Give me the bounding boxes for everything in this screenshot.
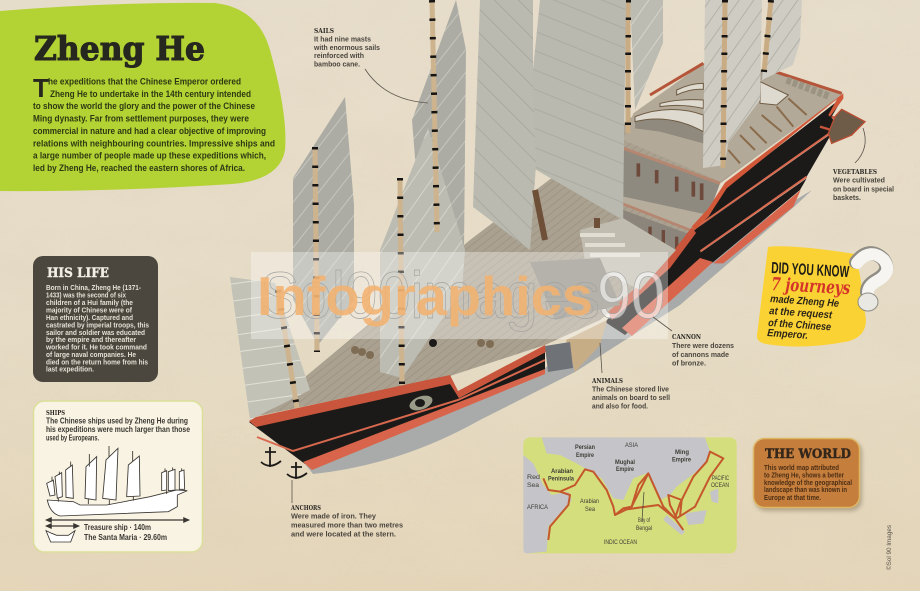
callout: did you know: made Zheng He xyxy=(770,293,840,310)
bow masts xyxy=(278,0,437,408)
his life text: of large naval companies. He xyxy=(46,350,136,359)
top rim xyxy=(692,93,843,230)
callout: sails: with enormous sails xyxy=(313,43,380,52)
map labels: AFRICA xyxy=(527,504,549,511)
map labels: INDIC OCEAN xyxy=(604,539,637,546)
hull bow section xyxy=(249,345,546,470)
callout: cannon: of cannons made xyxy=(672,350,729,359)
hull upper band xyxy=(687,97,843,233)
stern gallery with vegetable baskets xyxy=(828,109,865,143)
deck cargo xyxy=(530,218,676,320)
map labels: PACIFIC xyxy=(712,475,729,482)
his life text: died on the return home from his xyxy=(46,357,148,366)
callout: did you know: Emperor. xyxy=(767,327,809,342)
callout: animals xyxy=(591,343,670,410)
hull middle band xyxy=(690,133,832,257)
callout: vegetables: baskets. xyxy=(833,193,861,202)
map labels: Empire xyxy=(576,452,594,459)
his life text: 1433) was the second of six xyxy=(46,290,127,300)
intro text xyxy=(33,73,275,173)
map labels: Persian xyxy=(575,444,595,451)
lower wall xyxy=(623,210,687,262)
heading: his life: HIS LIFE xyxy=(47,266,109,281)
second deck xyxy=(623,197,708,230)
map labels: Arabian xyxy=(551,468,573,475)
panel: his life xyxy=(33,256,158,382)
his life text: children of a Hui family (the xyxy=(46,298,133,307)
callout: sails: SAILS xyxy=(314,27,334,35)
map labels: Ming xyxy=(675,449,689,456)
intro text: Zheng He to undertake in the 14th century intended xyxy=(50,88,251,99)
ship size comparison diagram xyxy=(46,446,189,542)
heading: ships: SHIPS xyxy=(46,409,65,417)
callout: anchors: measured more than two metres xyxy=(291,520,403,530)
heading: the world: THE WORLD xyxy=(765,447,851,462)
his life text: Han ethnicity). Captured and xyxy=(46,313,133,322)
ship illustration xyxy=(230,0,865,479)
awning interior xyxy=(635,114,703,143)
stern deck xyxy=(623,63,843,182)
mast base xyxy=(535,190,597,240)
map labels: Sea xyxy=(527,482,540,489)
intro text: commercial in nature and had a clear objective of improving xyxy=(33,125,266,136)
stern masts xyxy=(628,0,771,168)
far sails xyxy=(412,0,802,250)
panel: the world xyxy=(754,438,862,511)
main deck xyxy=(258,63,843,416)
intro text: Ming dynasty. Far from settlement purposes, they were xyxy=(33,112,249,124)
ship lengths: The Santa Maria · 29.60m xyxy=(84,533,167,542)
map labels xyxy=(527,442,729,546)
callout: vegetables: Were cultivated xyxy=(833,176,885,185)
callout: vegetables: VEGETABLES xyxy=(832,168,877,176)
map of zheng he voyages xyxy=(523,437,737,553)
ship lengths xyxy=(84,523,167,542)
upper deck wall xyxy=(623,148,720,215)
his life text: majority of Chinese were of xyxy=(46,306,132,314)
callout: did you know: at the request xyxy=(769,305,833,321)
callout: animals: The Chinese stored live xyxy=(592,384,669,394)
icon: question mark xyxy=(856,253,887,311)
the world text: This world map attributed xyxy=(764,463,839,472)
callout: vegetables: on board in special xyxy=(833,184,894,193)
red stripes xyxy=(692,128,837,257)
callout: sails xyxy=(313,27,428,103)
callout: did you know xyxy=(757,246,887,347)
map labels: Sea xyxy=(585,506,596,513)
callout: vegetables xyxy=(832,128,894,202)
rail details xyxy=(787,80,830,97)
his life text: sailor and soldier was educated xyxy=(46,328,145,337)
the world text: knowledge of the geographical xyxy=(764,478,852,487)
callout: did you know: DID YOU KNOW xyxy=(771,260,850,281)
far rail xyxy=(650,63,842,95)
callout: did you know: 7 journeys xyxy=(771,274,851,299)
panel: introduction xyxy=(0,3,285,191)
ships text: used by Europeans. xyxy=(46,434,99,442)
map labels: ASIA xyxy=(625,442,639,449)
intro text: he expeditions that the Chinese Emperor ordered xyxy=(48,76,241,86)
callout: cannon: CANNON xyxy=(672,333,701,341)
bow sails xyxy=(230,97,465,420)
awnings xyxy=(635,82,788,132)
the world text xyxy=(764,463,852,502)
the world text: to Zheng He, shows a better xyxy=(764,470,844,480)
his life text: last expedition. xyxy=(46,364,94,374)
callout: did you know: of the Chinese xyxy=(768,317,832,333)
callout: anchors: Were made of iron. They xyxy=(291,512,377,520)
his life text: by the empire and thereafter xyxy=(46,335,136,344)
the world text: landscape than was known in xyxy=(764,485,847,494)
his life text xyxy=(45,283,149,374)
voyage routes xyxy=(543,452,723,540)
his life text: Born in China, Zheng He (1371- xyxy=(46,283,141,292)
map labels: Empire xyxy=(672,456,691,464)
ships text xyxy=(46,416,190,442)
intro text: relations with neighbouring countries. Impressive ships and xyxy=(33,138,275,148)
callout: anchors xyxy=(290,480,403,538)
ship underside xyxy=(305,190,812,474)
callout: cannon: There were dozens xyxy=(672,341,734,350)
callout: sails: reinforced with xyxy=(314,51,364,60)
deck ribs xyxy=(728,98,807,163)
his life text: castrated by imperial troops, this xyxy=(46,320,149,329)
callout: anchors: ANCHORS xyxy=(290,504,321,512)
stern decks and hull xyxy=(623,63,865,263)
length arrows xyxy=(46,518,189,528)
title: Zheng He xyxy=(34,29,205,68)
hull midship section xyxy=(605,227,713,336)
callout: sails: bamboo cane. xyxy=(314,60,360,68)
callout: cannon xyxy=(653,317,734,368)
landmasses xyxy=(542,437,710,500)
his life text: worked for it. He took command xyxy=(45,342,147,352)
ships text: his expeditions were much larger than those xyxy=(46,425,190,434)
intro text: to show the world the glory and the power of the Chinese xyxy=(33,100,255,111)
callout: sails: It had nine masts xyxy=(314,34,371,44)
callout: animals: ANIMALS xyxy=(591,377,623,385)
callout: cannon: of bronze. xyxy=(672,358,706,368)
map labels: Empire xyxy=(616,466,634,473)
hull lower band xyxy=(685,178,807,263)
santa maria outline xyxy=(46,531,75,542)
the world text: Europe at that time. xyxy=(764,493,821,502)
panel: ships xyxy=(34,401,202,552)
ships text: The Chinese ships used by Zheng He during xyxy=(46,416,188,426)
watermark: Infographics xyxy=(257,265,593,327)
map labels: Peninsula xyxy=(548,476,574,482)
callout: animals: animals on board to sell xyxy=(592,393,670,402)
icon: anchors xyxy=(261,447,307,479)
barrels on deck xyxy=(351,339,494,359)
map labels: Mughal xyxy=(615,459,635,466)
animal pen cutaway xyxy=(545,320,607,372)
main sails xyxy=(473,0,626,250)
copyright credit: ©Sol 90 Images xyxy=(886,525,893,570)
watermark: 90 xyxy=(597,258,665,332)
map labels: Red xyxy=(527,474,541,481)
map labels: Bengal xyxy=(636,525,652,532)
map labels: Bay of xyxy=(638,517,650,524)
callout: anchors: and were located at the stern. xyxy=(291,530,396,538)
ship lengths: Treasure ship · 140m xyxy=(84,523,151,532)
map labels: Arabian xyxy=(580,498,599,505)
intro text: a large number of people made up these expeditions which, xyxy=(33,150,266,160)
intro text: T xyxy=(33,73,49,103)
watermark: Sol90images xyxy=(260,258,600,332)
callout: animals: and also for food. xyxy=(592,402,648,410)
intro text: led by Zheng He, reached the eastern shores of Africa. xyxy=(33,162,245,173)
map labels: OCEAN xyxy=(711,482,729,489)
icon: eye on the bow xyxy=(408,393,434,413)
